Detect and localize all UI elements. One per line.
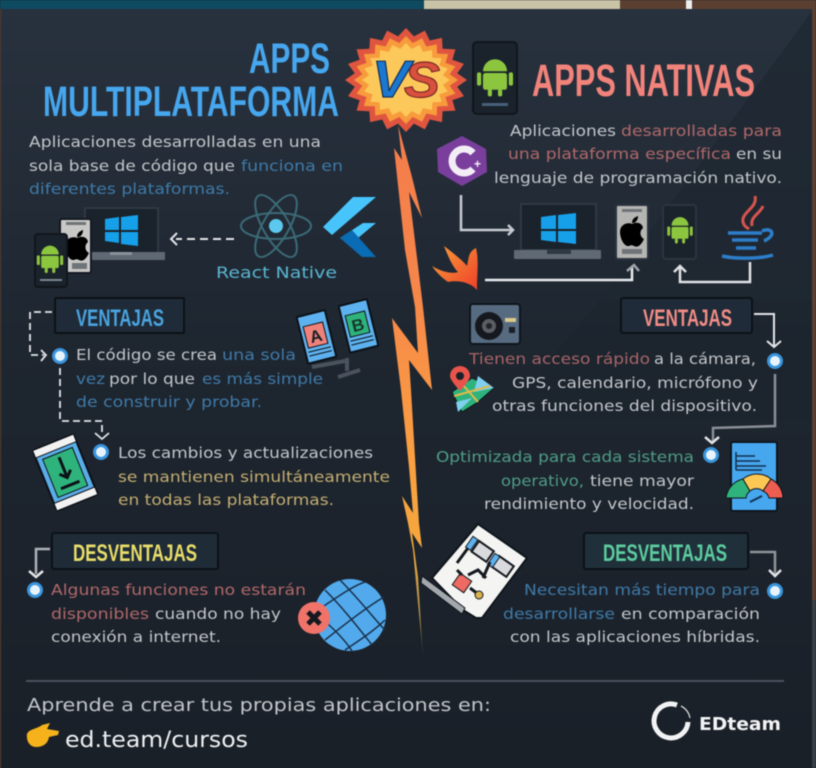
text: no internet: disponibles <box>51 605 149 623</box>
icon: camera <box>470 304 520 344</box>
text: single codebase: de construir y probar. <box>76 393 262 411</box>
icon: multiplatform devices <box>35 208 165 287</box>
text: optimized: tiene mayor <box>590 472 695 490</box>
icon: pointing hand <box>27 723 59 747</box>
text: footer call to action: Aprende a crear tus propias aplicaciones en: <box>27 695 491 716</box>
text: native description: una plataforma específica <box>508 145 731 163</box>
text: multiplatform description: Aplicaciones desarrolladas en una <box>29 133 321 151</box>
lightning bolt <box>392 125 432 657</box>
text: simultaneous updates: Los cambios y actualizaciones <box>118 444 373 462</box>
arrow: desventajas to point <box>750 552 781 576</box>
icon: ab phones <box>297 299 378 377</box>
text: more development time: en comparación <box>621 605 760 623</box>
text: optimized: operativo, <box>501 472 584 490</box>
text: single codebase: El código se crea <box>76 346 217 364</box>
bullet <box>768 354 782 368</box>
text: device access: GPS, calendario, micrófono y <box>512 374 758 392</box>
text: no internet: Algunas funciones no estarán <box>51 581 306 599</box>
text: single codebase: una sola <box>222 346 296 364</box>
text: single codebase: por lo que <box>109 370 195 388</box>
text: single codebase: es más simple <box>202 370 323 388</box>
arrow: first point to second point <box>60 368 109 439</box>
badge: desventajas left: DESVENTAJAS <box>73 540 197 567</box>
badge: desventajas right: DESVENTAJAS <box>603 540 727 567</box>
icon: native android phone <box>663 205 696 259</box>
icon: react <box>241 189 311 263</box>
arrow: first point to second point <box>705 374 775 443</box>
versus starburst: S <box>404 52 440 108</box>
icon: android phone <box>473 42 517 114</box>
badge: ventajas left: VENTAJAS <box>76 305 164 332</box>
versus starburst <box>345 28 467 132</box>
icon: flow diagram sheet <box>421 524 527 618</box>
badge: ventajas right: VENTAJAS <box>643 305 732 332</box>
icon: tablet with download <box>33 434 98 511</box>
badge: ventajas left <box>55 298 184 333</box>
arrow: ventajas to first point <box>30 312 52 361</box>
text: no internet <box>51 581 306 646</box>
arrow: swift to apple phone <box>485 265 639 280</box>
icon: performance gauge <box>726 442 783 511</box>
logo: edteam <box>654 704 781 738</box>
text: native description <box>494 122 782 187</box>
icon: globe with error <box>298 579 386 651</box>
text: more development time: con las aplicaciones híbridas. <box>510 628 760 646</box>
logo: edteam: EDteam <box>699 714 781 735</box>
text: simultaneous updates: en todas las plataformas. <box>118 491 334 509</box>
text: url: ed.team/cursos <box>65 728 248 753</box>
text: native description: Aplicaciones <box>510 122 616 140</box>
text: more development time <box>503 581 760 646</box>
title: apps multiplataforma: MULTIPLATAFORMA <box>43 78 339 126</box>
text: single codebase <box>76 346 323 411</box>
bullet <box>94 446 108 458</box>
icon: swift <box>432 246 478 290</box>
icon: java <box>722 196 773 258</box>
icon: native apple phone <box>616 205 648 259</box>
versus starburst: V <box>372 51 415 109</box>
title: apps multiplataforma <box>43 35 339 126</box>
text: device access <box>468 350 758 415</box>
arrow: frameworks to devices <box>171 233 234 245</box>
text: native description: lenguaje de programación nativo. <box>494 169 782 187</box>
text: more development time: Necesitan más tiempo para <box>524 581 760 599</box>
icon: native laptop <box>514 204 601 259</box>
arrow: ventajas to first point <box>754 314 781 347</box>
divider <box>26 680 784 682</box>
text: multiplatform description: diferentes plataformas. <box>29 180 230 198</box>
text: no internet: cuando no hay <box>155 605 281 623</box>
text: optimized: rendimiento y velocidad. <box>484 495 694 513</box>
bullet <box>768 584 782 598</box>
arrow: c sharp to laptop <box>461 195 513 235</box>
text: multiplatform description <box>29 133 343 198</box>
bullet <box>28 584 42 596</box>
icon: map pin <box>450 366 494 412</box>
text: multiplatform description: sola base de código que <box>29 157 235 175</box>
text: native description: desarrolladas para <box>621 122 782 140</box>
badge: ventajas right <box>621 298 752 333</box>
icon: flutter <box>323 197 376 257</box>
badge: desventajas right <box>584 533 748 569</box>
badge: desventajas left <box>52 533 218 569</box>
text: multiplatform description: funciona en <box>241 157 343 175</box>
icon: ab phones: A <box>308 326 324 347</box>
title: apps multiplataforma: APPS <box>249 35 330 83</box>
bullet <box>54 350 66 362</box>
bullet <box>704 448 718 462</box>
text: no internet: conexión a internet. <box>51 628 221 646</box>
text: simultaneous updates <box>118 444 390 509</box>
icon: ab phones: B <box>350 315 366 336</box>
arrow: desventajas to point <box>29 549 50 577</box>
text: optimized: Optimizada para cada sistema <box>436 448 694 466</box>
text: device access: otras funciones del dispositivo. <box>492 397 757 415</box>
text: more development time: desarrollarse <box>503 605 615 623</box>
arrow: java to android phone <box>674 262 750 282</box>
icon: c sharp: + <box>474 157 481 171</box>
text: single codebase: vez <box>76 370 105 388</box>
text: native description: en su <box>736 145 782 163</box>
text: device access: Tienen acceso rápido <box>468 350 650 368</box>
icon: c sharp <box>437 136 487 186</box>
text: simultaneous updates: se mantienen simultáneamente <box>118 468 390 486</box>
text: device access: a la cámara, <box>654 350 756 368</box>
label: react native: React Native <box>216 263 337 282</box>
text: optimized <box>436 448 695 513</box>
